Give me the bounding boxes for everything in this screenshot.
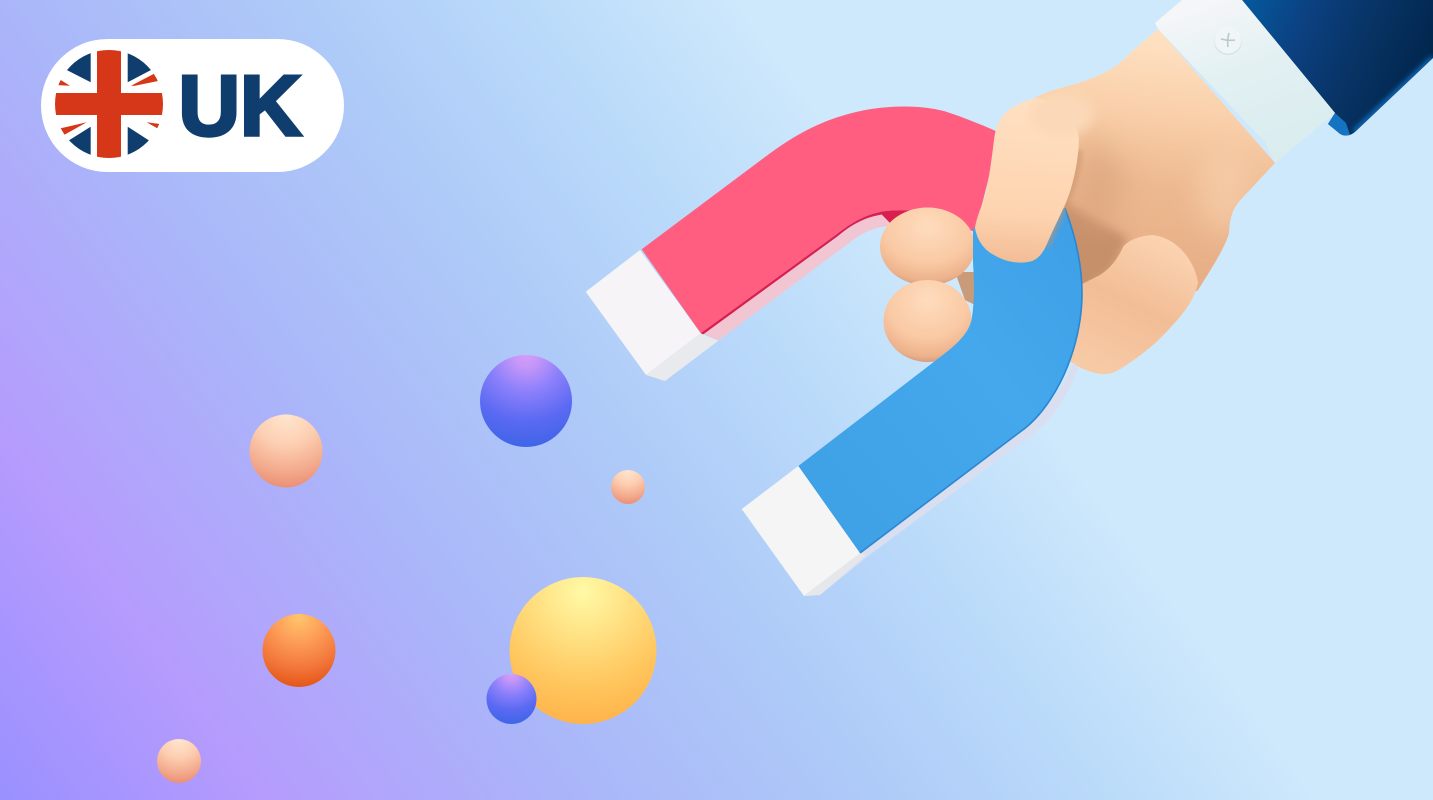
blue pole underside [804,553,866,596]
sphere: orange [262,614,336,687]
label: UK: UK [178,59,302,154]
finger ball upper [880,208,975,286]
badge pill [41,39,344,172]
finger body [975,98,1079,263]
blue pole end [742,466,860,596]
sleeve [1242,0,1433,136]
sphere: peach large [250,414,322,488]
logo badge: UK [41,39,344,172]
sphere: purple small [486,674,536,724]
hand: lower finger [1060,235,1198,374]
sleeve lining [1328,113,1350,135]
red pole end [586,250,701,375]
finger blend into hand [1036,95,1094,136]
palm highlight right [1196,162,1252,232]
red pole underside [646,333,718,381]
finger ball lower [884,280,972,362]
cuff [1155,0,1335,163]
sphere: peach bottom [157,739,201,783]
blue arm underside [806,362,1078,596]
red arm underside [703,213,892,341]
finger soft shadow [1046,150,1079,246]
blue arm top face [798,208,1082,553]
icon: UK flag [55,50,163,158]
sleeve lower highlight [1354,58,1433,132]
hand: palm [1035,29,1275,292]
magnet: blue arm [742,208,1082,596]
red arm shadow edge [701,210,914,334]
red arm top face [642,106,1000,333]
shading beside index finger [1077,140,1122,216]
hand: two curled fingers [880,208,976,362]
sphere: purple large [480,355,572,447]
hand: index finger [975,92,1094,263]
blue arm outer edge [860,208,1082,553]
sphere: peach small [611,470,645,504]
magnet: red arm [586,106,1000,381]
sphere: yellow [510,577,656,724]
cuff button [1214,26,1242,55]
shading behind magnet [1064,204,1129,284]
